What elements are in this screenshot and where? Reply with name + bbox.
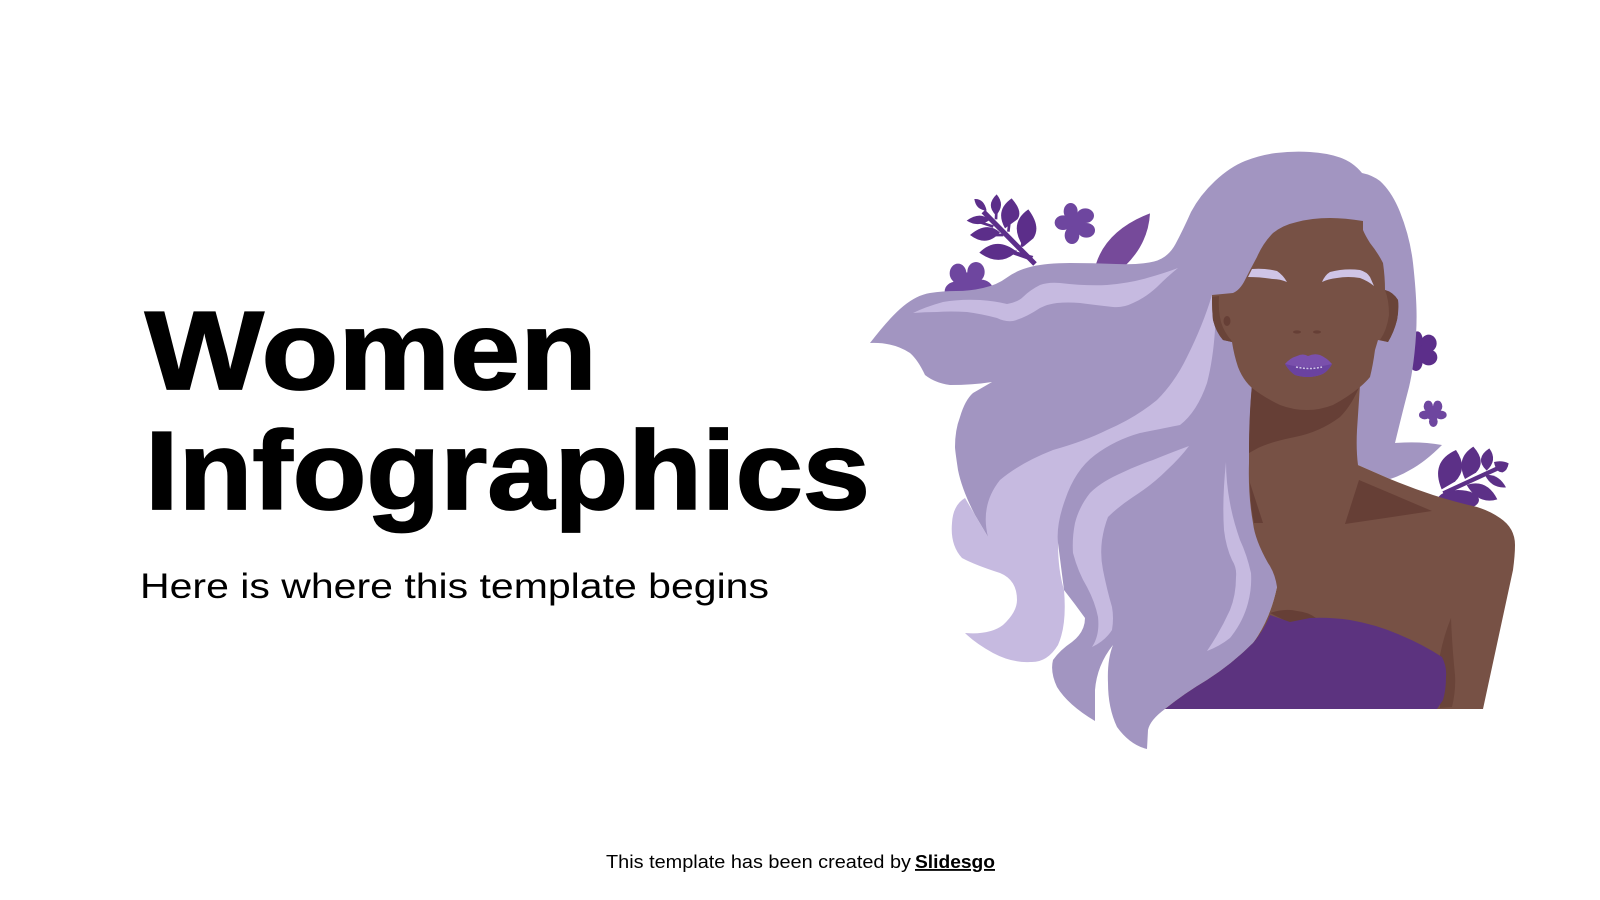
title: Infographics	[145, 409, 870, 533]
icon: leafy branch right	[1438, 447, 1509, 510]
dress	[1165, 615, 1446, 709]
icon: small flower right	[1419, 401, 1447, 427]
icon: flower right of hair	[1409, 331, 1437, 371]
hair highlight: top streak	[913, 268, 1178, 321]
left eyebrow	[1248, 269, 1287, 282]
title	[145, 289, 870, 533]
icon: leafy branch top left	[967, 194, 1036, 264]
hair highlight: middle streak	[1073, 446, 1189, 647]
right ear	[1380, 290, 1398, 342]
footer credit: Slidesgo	[915, 851, 995, 872]
chest shadow	[1270, 610, 1316, 623]
hair highlight: large back lock	[952, 295, 1215, 662]
hair highlight: front streak	[1207, 462, 1251, 651]
icon: flower behind hair	[945, 262, 993, 301]
nose	[1293, 330, 1321, 334]
neck side shadow	[1250, 483, 1263, 523]
icon: five petal flower	[1055, 203, 1095, 244]
neck shadow	[1249, 385, 1360, 453]
icon: single leaf	[1096, 213, 1150, 266]
right eyebrow	[1322, 269, 1374, 286]
ear hole	[1224, 316, 1230, 326]
footer credit: This template has been created by	[606, 851, 912, 872]
subtitle: Here is where this template begins	[140, 567, 769, 606]
face	[1212, 218, 1398, 410]
neck and shoulders	[1165, 385, 1515, 709]
left ear	[1212, 296, 1232, 342]
lips	[1285, 354, 1332, 377]
collarbone shadow	[1345, 480, 1432, 524]
illustration: woman with purple hair	[870, 152, 1515, 749]
arm shadow	[1440, 618, 1455, 708]
title: Women	[145, 289, 597, 413]
hair silhouette	[870, 152, 1442, 749]
